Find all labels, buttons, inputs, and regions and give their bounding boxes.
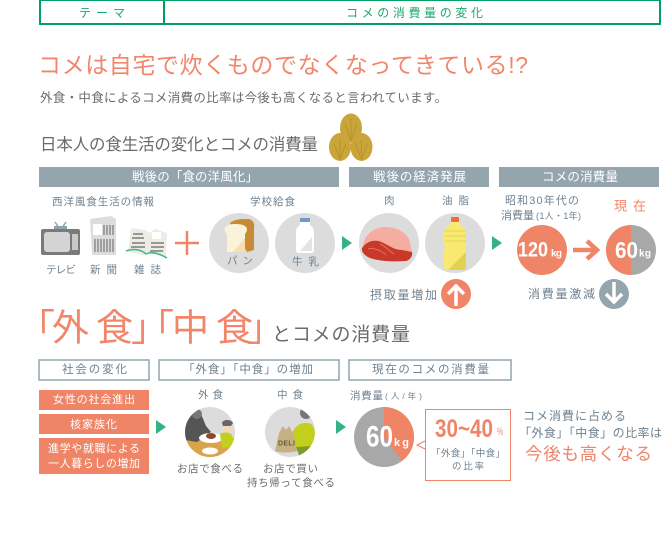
header: theme bar: コメの消費量の変化 xyxy=(346,5,483,20)
callout: 30 to 40 percent: の比率 xyxy=(452,460,484,472)
section heading: diet change: 日本人の食生活の変化とコメの消費量 xyxy=(40,135,318,154)
icon: oil bottle circle xyxy=(425,213,485,273)
icon: rice grains xyxy=(329,114,372,161)
label: intake increase: 摂取量増加 xyxy=(370,287,437,302)
panel: rice consumption header: コメの消費量 xyxy=(542,169,618,184)
label: meat: 肉 xyxy=(384,194,394,207)
chart: 60kg half circle: 60 xyxy=(615,237,638,263)
icon: plus xyxy=(175,231,199,255)
icon: takeout circle: DELI xyxy=(278,440,295,448)
icon: newspaper xyxy=(90,216,116,255)
box: living alone: 一人暮らしの増加 xyxy=(48,456,140,470)
text: share of rice consumption xyxy=(519,408,662,464)
subtitle text: 外食・中食によるコメ消費の比率は今後も高くなると言われています。 xyxy=(40,90,447,105)
label: TV: テレビ xyxy=(46,264,76,276)
chart: 60kg half circle: kg xyxy=(639,248,651,260)
label: buy and take home: お店で買い xyxy=(263,463,318,475)
label: showa consumption: (1人・1年) xyxy=(536,210,581,221)
label: consumption per person: 消費量 xyxy=(350,389,384,402)
label: western info: 西洋風食生活の情報 xyxy=(52,195,154,208)
label: consumption per person xyxy=(350,389,422,402)
callout: 30 to 40 percent: 「外食」「中食」 xyxy=(431,448,505,460)
subhead: present consumption xyxy=(349,360,511,380)
box: living alone xyxy=(39,438,149,474)
icon: magazine xyxy=(126,228,167,258)
arrow: triangle 1 xyxy=(342,236,352,250)
label: school lunch: 学校給食 xyxy=(250,195,296,208)
subhead: increase xyxy=(159,360,339,380)
text: share of rice consumption: コメ消費に占める xyxy=(523,408,626,423)
label: newspaper: 新 聞 xyxy=(90,264,117,276)
icon: meat circle xyxy=(359,213,419,273)
icon: bread circle: パ ン xyxy=(227,255,253,267)
icon: down arrow xyxy=(599,279,629,309)
section heading: eating out xyxy=(18,308,410,348)
chart: 120kg circle: 120 xyxy=(518,238,548,262)
text: share of rice consumption: 「外食」「中食」の比率は xyxy=(519,425,662,440)
label: consumption decrease: 消費量激減 xyxy=(528,286,595,301)
label: oil: 油 脂 xyxy=(442,194,470,207)
panel: economic growth header xyxy=(349,167,489,187)
arrow: triangle 4 xyxy=(336,420,346,434)
label: showa consumption: 消費量 xyxy=(501,208,534,222)
chart: 60kg pie: 60 xyxy=(366,420,393,454)
icon: television xyxy=(41,222,80,255)
label: buy and take home: 持ち帰って食べる xyxy=(247,476,335,489)
subhead: present consumption: 現在のコメの消費量 xyxy=(372,362,489,376)
subhead: social change: 社会の変化 xyxy=(62,362,128,376)
icon: milk circle xyxy=(275,213,335,273)
icon: restaurant circle xyxy=(185,407,235,458)
icon: milk circle: 牛 乳 xyxy=(292,255,320,268)
label: showa consumption: 昭和30年代の xyxy=(505,193,579,207)
chart: 60kg half circle xyxy=(606,225,656,275)
callout: 30 to 40 percent: 30~40 xyxy=(435,415,493,443)
panel: rice consumption header xyxy=(499,167,659,187)
label: eat at restaurant: お店で食べる xyxy=(177,463,243,475)
label: magazine: 雑 誌 xyxy=(134,263,162,276)
panel: western diet header: 戦後の「食の洋風化」 xyxy=(132,169,258,184)
box: women in society: 女性の社会進出 xyxy=(53,392,135,406)
arrow: reduction xyxy=(573,241,597,259)
label: takeout: 中 食 xyxy=(277,388,304,401)
icon: up arrow xyxy=(441,279,471,309)
label: consumption per person: (人/年) xyxy=(385,391,422,401)
icon: takeout circle xyxy=(265,407,315,458)
box: nuclear family: 核家族化 xyxy=(70,417,117,431)
arrow: triangle 3 xyxy=(156,420,166,434)
box: nuclear family xyxy=(39,414,149,434)
label: showa consumption xyxy=(501,193,581,222)
box: women in society xyxy=(39,390,149,410)
callout: 30 to 40 percent: % xyxy=(497,426,503,438)
box: living alone: 進学や就職による xyxy=(48,441,140,455)
icon: bread circle xyxy=(209,213,269,273)
panel: western diet header xyxy=(39,167,339,187)
panel: economic growth header: 戦後の経済発展 xyxy=(373,170,466,184)
label: present: 現 在 xyxy=(614,198,646,214)
title: コメは自宅で炊くものでなくなってきている!? xyxy=(38,52,528,78)
header: theme bar xyxy=(40,0,660,24)
chart: 60kg pie xyxy=(354,407,414,467)
callout: 30 to 40 percent xyxy=(417,410,510,480)
header: theme bar: テーマ xyxy=(79,6,125,20)
section heading: eating out: とコメの消費量 xyxy=(272,324,410,346)
arrow: triangle 2 xyxy=(492,236,502,250)
subhead: social change xyxy=(39,360,149,380)
subhead: increase: 「外食」「中食」の増加 xyxy=(183,363,313,376)
text: share of rice consumption: 今後も高くなる xyxy=(525,444,652,464)
chart: 60kg pie: kg xyxy=(394,437,409,449)
label: buy and take home xyxy=(247,463,335,489)
label: eating out: 外 食 xyxy=(198,389,224,401)
section heading: eating out: 「外食」「中食」 xyxy=(18,308,284,348)
chart: 120kg circle: kg xyxy=(551,248,562,260)
chart: 120kg circle xyxy=(517,225,567,275)
